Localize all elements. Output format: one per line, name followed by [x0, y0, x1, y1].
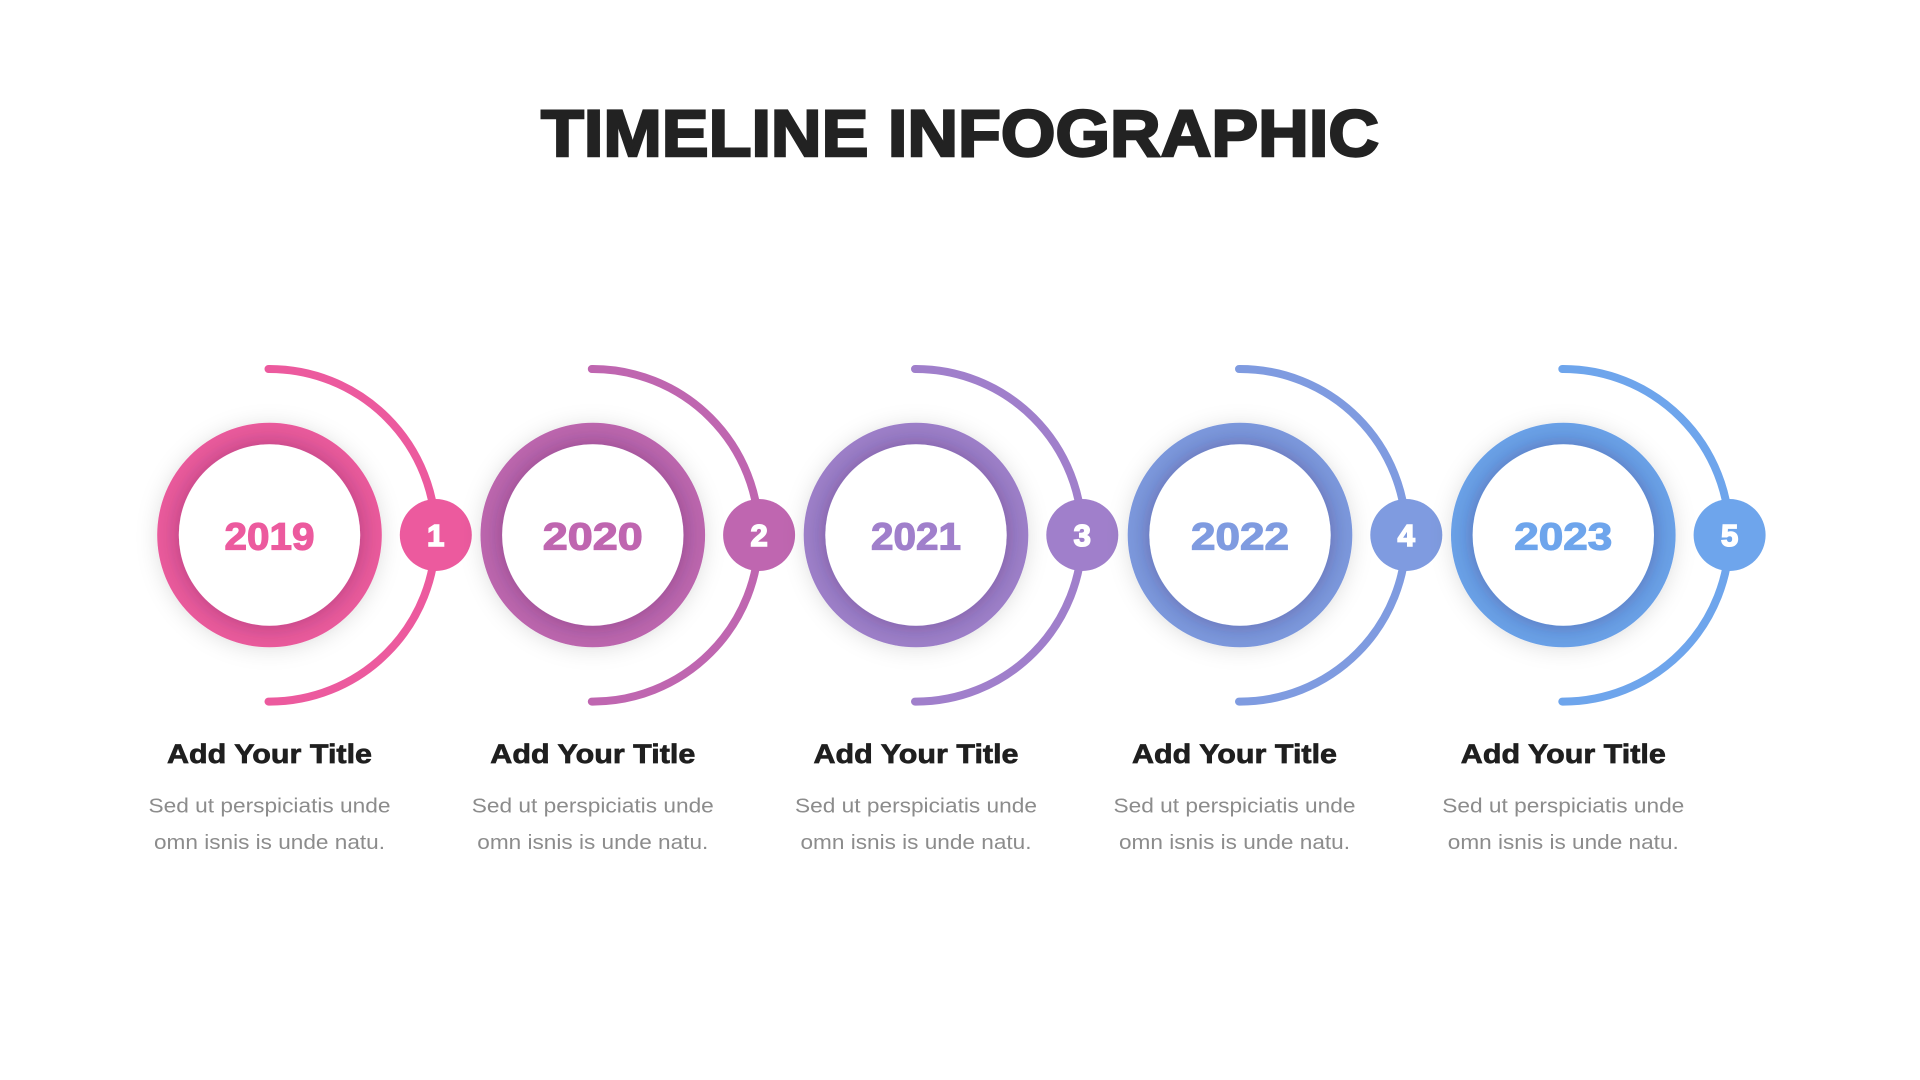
number badge 5: 5 — [1721, 518, 1738, 553]
heading 1: Add Your Title — [167, 739, 372, 769]
description 2 — [472, 794, 714, 854]
description 3: omn isnis is unde natu. — [800, 831, 1032, 854]
description 1: Sed ut perspiciatis unde — [148, 794, 390, 818]
heading 2: Add Your Title — [490, 739, 695, 769]
year ring 2022 — [1128, 423, 1352, 647]
number badge 3 — [1046, 499, 1118, 571]
number badge 4: 4 — [1398, 518, 1416, 553]
description 5 — [1442, 794, 1684, 854]
timeline step 5: 2023 — [1442, 369, 1766, 854]
number badge 4 — [1370, 499, 1442, 571]
year ring 2023 — [1451, 423, 1676, 647]
arc bracket 1 — [268, 369, 436, 702]
number badge 1: 1 — [427, 518, 444, 553]
title: TIMELINE INFOGRAPHIC — [541, 96, 1379, 170]
heading 4: Add Your Title — [1132, 739, 1337, 769]
year label 2023: 2023 — [1514, 516, 1612, 558]
year ring 2020 — [480, 423, 705, 647]
description 4: Sed ut perspiciatis unde — [1114, 794, 1356, 818]
arc bracket 2 — [592, 369, 759, 702]
timeline step 1: 2019 — [148, 369, 472, 854]
timeline step 2: 2020 — [472, 369, 795, 854]
year ring 2019 — [157, 423, 382, 647]
description 5: omn isnis is unde natu. — [1448, 831, 1679, 854]
description 2: omn isnis is unde natu. — [477, 831, 708, 854]
heading 3: Add Your Title — [814, 739, 1018, 769]
description 1 — [148, 794, 390, 854]
year label 2020: 2020 — [543, 516, 643, 558]
heading 5: Add Your Title — [1461, 739, 1666, 769]
arc bracket 5 — [1562, 369, 1729, 702]
number badge 5 — [1694, 499, 1766, 571]
number badge 2: 2 — [750, 518, 768, 553]
number badge 3: 3 — [1074, 518, 1091, 553]
timeline step 4: 2022 — [1114, 369, 1442, 854]
description 4: omn isnis is unde natu. — [1119, 831, 1350, 854]
description 3: Sed ut perspiciatis unde — [795, 794, 1037, 818]
description 3 — [795, 794, 1037, 854]
year label 2021: 2021 — [871, 516, 961, 558]
year label 2019: 2019 — [224, 516, 314, 558]
arc bracket 4 — [1239, 369, 1406, 702]
number badge 1 — [400, 499, 472, 571]
number badge 2 — [723, 499, 795, 571]
description 5: Sed ut perspiciatis unde — [1442, 794, 1684, 818]
description 1: omn isnis is unde natu. — [154, 831, 385, 854]
description 4 — [1114, 794, 1356, 854]
arc bracket 3 — [915, 369, 1082, 702]
year label 2022: 2022 — [1191, 516, 1289, 558]
year ring 2021 — [804, 423, 1028, 647]
description 2: Sed ut perspiciatis unde — [472, 794, 714, 818]
timeline step 3: 2021 — [795, 369, 1118, 854]
